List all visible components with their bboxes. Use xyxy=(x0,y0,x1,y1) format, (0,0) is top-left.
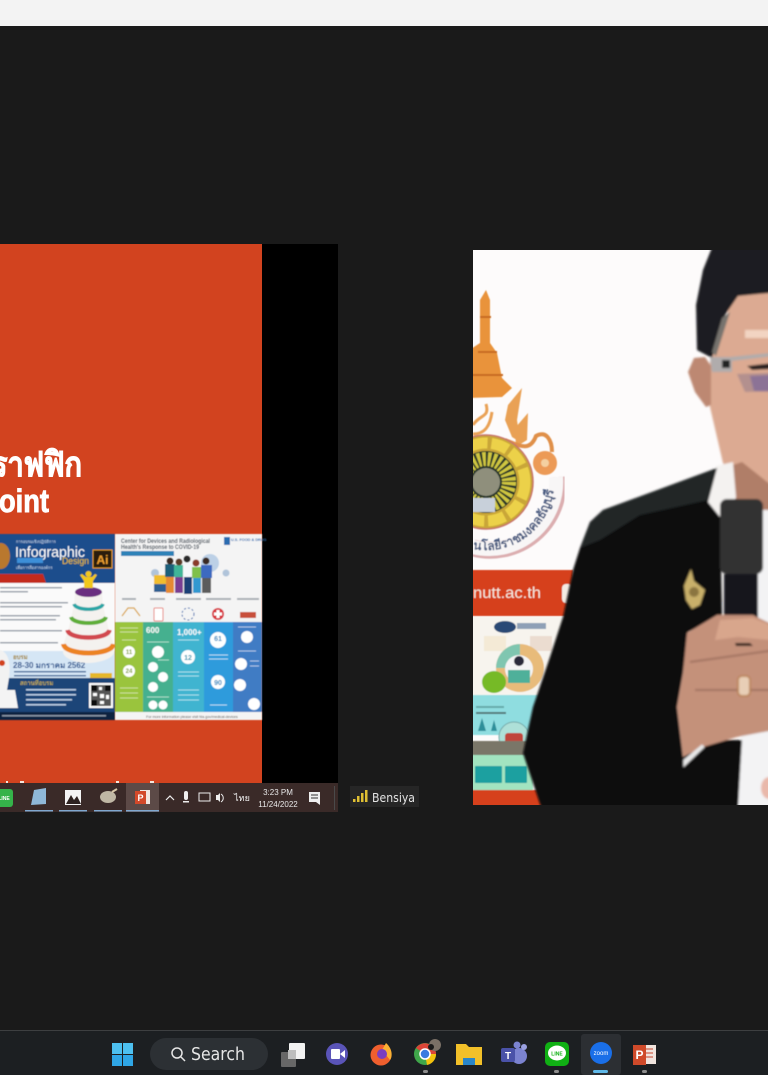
system tray icons: ไทย xyxy=(233,793,250,803)
red banner with URL xyxy=(465,570,573,616)
icon: task view xyxy=(281,1043,305,1067)
column: teal xyxy=(143,622,173,712)
icon: PowerPoint: P xyxy=(635,1048,644,1062)
search box: Search xyxy=(191,1044,245,1065)
icon: PowerPoint xyxy=(633,1045,656,1065)
panel: presenter video xyxy=(473,250,768,805)
venue band xyxy=(0,678,115,712)
icon: Teams xyxy=(501,1042,527,1064)
Ai badge xyxy=(93,550,112,568)
column icons xyxy=(122,608,256,621)
icon: folder xyxy=(456,1044,482,1065)
clock xyxy=(258,788,298,809)
viewer's Windows taskbar xyxy=(0,1030,768,1075)
poster: Infographic Design course: 28-30 มกราคม 2562 xyxy=(13,661,86,670)
icon: paint palette xyxy=(100,789,117,803)
icon: Zoom: zoom xyxy=(594,1051,608,1057)
slide title: oint xyxy=(0,483,49,519)
spire xyxy=(473,290,512,399)
ear xyxy=(688,357,711,407)
column: cyan xyxy=(173,622,204,712)
icon: pictures xyxy=(65,790,81,805)
banner infographic xyxy=(473,617,562,805)
poster footer: For more information please visit fda.gov/medical-devices xyxy=(146,715,238,719)
column: indigo xyxy=(233,622,262,712)
FDA logo xyxy=(224,537,266,545)
icon: Zoom xyxy=(581,1034,621,1075)
hand at lower edge xyxy=(761,777,768,799)
column: green xyxy=(115,622,143,712)
column: blue: 61 xyxy=(214,636,222,643)
icon: notifications xyxy=(309,792,320,805)
system tray icons xyxy=(166,791,250,803)
schedule band xyxy=(0,651,115,678)
jacket xyxy=(523,468,742,825)
people illustration xyxy=(151,554,230,594)
hair xyxy=(696,235,768,358)
icon: PowerPoint: P xyxy=(137,793,144,803)
icon: LINE: LINE xyxy=(551,1052,563,1058)
top window bar xyxy=(0,0,768,26)
neck and face xyxy=(708,291,768,484)
icon: LINE xyxy=(545,1042,569,1066)
poster: Infographic Design course xyxy=(0,534,115,720)
poster: CDRH response to COVID-19 xyxy=(115,534,266,720)
red banner with URL: nutt.ac.th xyxy=(473,585,541,602)
layered cake pyramid xyxy=(63,571,114,663)
naga ornaments xyxy=(505,388,522,442)
column: blue: 90 xyxy=(214,680,222,687)
poster: Infographic Design course: การอบรมเชิงปฏิบัติการ xyxy=(16,539,57,544)
icon: PowerPoint xyxy=(135,790,150,804)
icon: Windows start xyxy=(112,1043,133,1066)
clock: 11/24/2022 xyxy=(258,800,298,809)
column labels xyxy=(122,598,259,600)
column: cyan: 1,000+ xyxy=(177,628,202,637)
icon: document xyxy=(31,788,46,805)
icon: Teams: T xyxy=(505,1051,511,1062)
panel: shared slide xyxy=(0,244,338,783)
poster: Infographic Design course: สถานที่อบรม xyxy=(20,679,53,687)
glasses xyxy=(710,351,768,392)
poster: Infographic Design course: Design xyxy=(62,556,89,566)
seal xyxy=(473,434,534,530)
column: green: 11 xyxy=(126,650,133,656)
microphone xyxy=(720,499,763,618)
collar xyxy=(708,462,736,517)
poster: Infographic Design course: อบรม xyxy=(13,654,28,661)
column: blue xyxy=(204,622,233,712)
seal xyxy=(0,543,10,569)
next line of slide text xyxy=(6,781,154,783)
icon: Chrome xyxy=(414,1039,441,1065)
poster: Infographic Design course: Infographic xyxy=(15,544,85,561)
column: cyan: 12 xyxy=(184,655,192,662)
slide title xyxy=(0,446,82,519)
running app indicators xyxy=(423,1070,647,1073)
search box xyxy=(150,1038,268,1070)
ring xyxy=(738,676,750,696)
participant name tag: Bensiya xyxy=(372,791,415,805)
column: green: 24 xyxy=(126,669,133,675)
rocket xyxy=(0,650,10,690)
poster: Infographic Design course: เพื่อการสื่อสารองค์กร xyxy=(16,565,53,570)
QR code xyxy=(89,683,113,708)
highlighted app button xyxy=(126,783,159,812)
poster: CDRH response to COVID-19: Center for Devices and Radiological xyxy=(121,538,210,545)
emblem xyxy=(473,290,564,560)
name band xyxy=(473,477,558,550)
participant name tag xyxy=(350,786,419,807)
column: teal: 600 xyxy=(146,626,160,635)
presenter xyxy=(523,235,768,825)
Ai badge: Ai xyxy=(96,553,108,567)
emblem: นโลยีราชมงคลธัญบุรี xyxy=(474,488,556,552)
presenter's Windows taskbar xyxy=(0,783,338,812)
shirt cuff xyxy=(684,745,704,766)
red heading band xyxy=(0,574,46,583)
icon: video meet xyxy=(326,1043,348,1065)
hand xyxy=(677,615,768,757)
shirt xyxy=(736,508,768,805)
FDA logo: U.S. FOOD & DRUG xyxy=(231,538,266,542)
lapel pin xyxy=(684,569,705,609)
clock: 3:23 PM xyxy=(263,788,293,797)
poster: CDRH response to COVID-19: Health's Response to COVID-19 xyxy=(121,544,199,551)
icon: Firefox xyxy=(370,1043,392,1066)
icon: LINE xyxy=(0,789,13,807)
